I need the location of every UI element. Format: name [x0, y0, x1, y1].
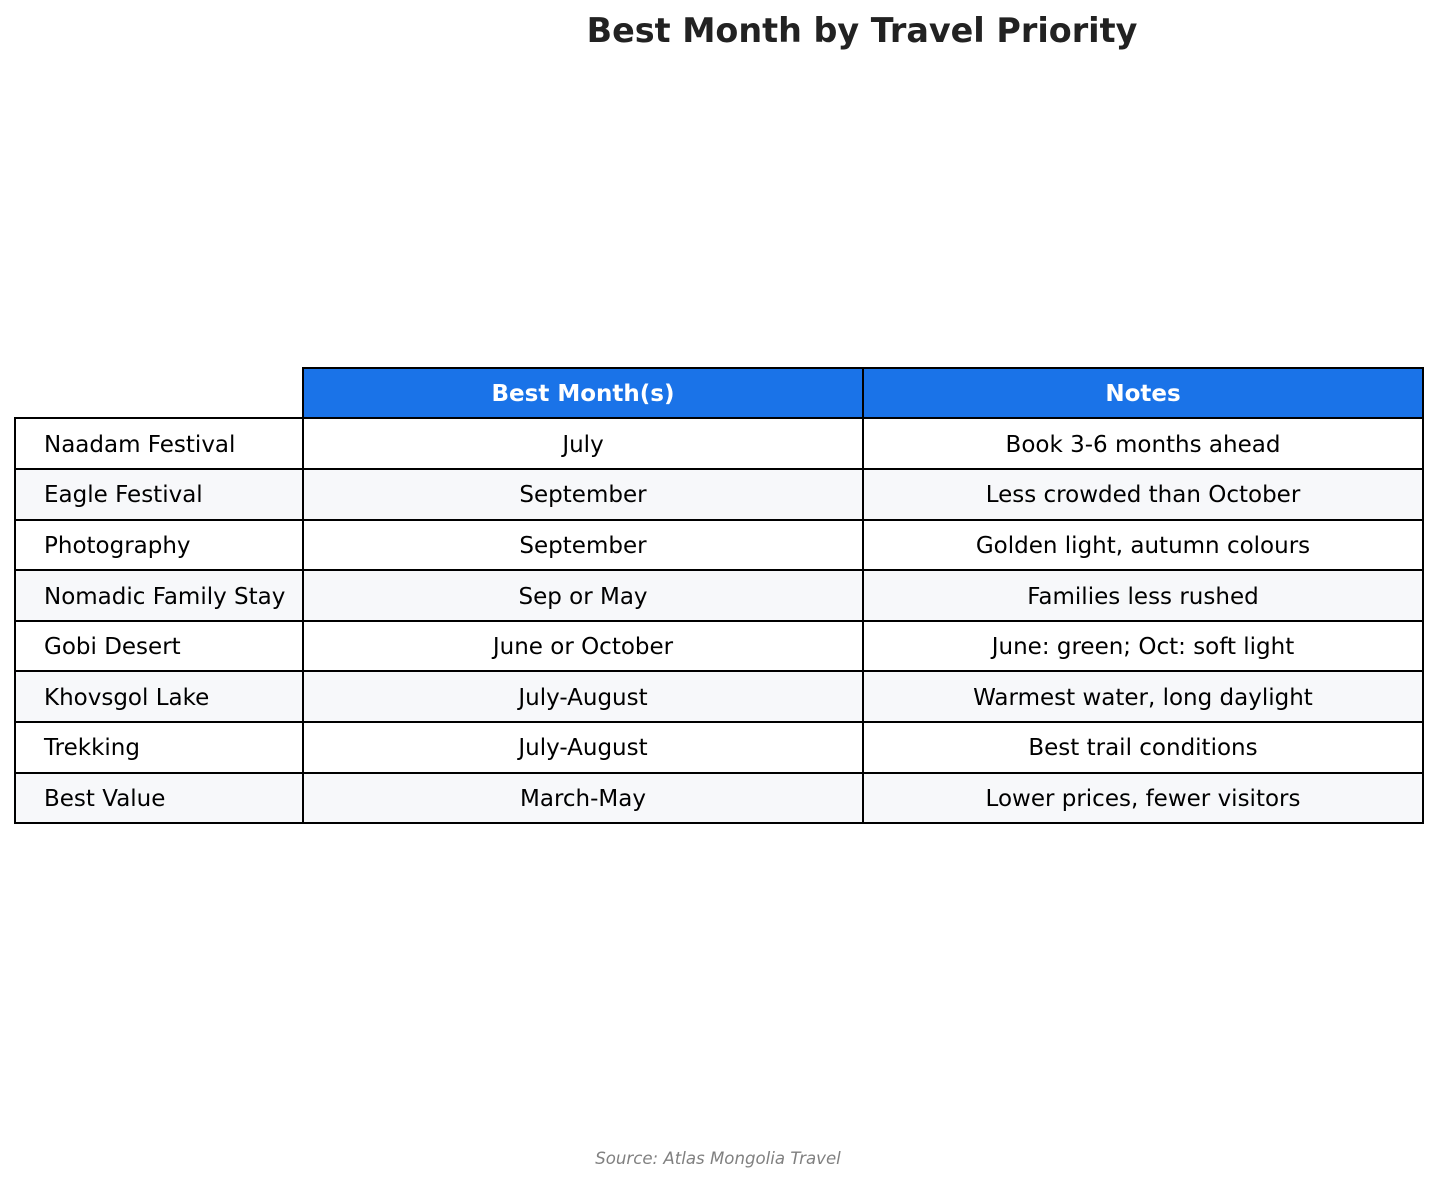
row labels: Gobi Desert	[44, 634, 181, 660]
notes column: June: green; Oct: soft light	[990, 634, 1294, 660]
notes column: Golden light, autumn colours	[976, 533, 1310, 559]
notes column: Book 3-6 months ahead	[1006, 432, 1280, 458]
source note: Source: Atlas Mongolia Travel	[595, 1149, 841, 1168]
best months column: September	[519, 533, 647, 559]
best months column: July	[560, 432, 604, 458]
notes column	[973, 432, 1313, 812]
notes column: Warmest water, long daylight	[973, 685, 1313, 711]
title: Best Month by Travel Priority	[587, 11, 1138, 50]
best months column: June or October	[491, 634, 674, 660]
row labels: Photography	[44, 533, 191, 559]
row labels: Eagle Festival	[44, 482, 203, 508]
notes column: Less crowded than October	[986, 482, 1301, 508]
best months column	[491, 432, 674, 812]
row backgrounds	[15, 418, 1423, 823]
header row: Notes	[1105, 381, 1181, 407]
row labels	[43, 432, 285, 812]
best months column: July-August	[516, 735, 648, 761]
header row	[303, 368, 1423, 418]
row labels: Naadam Festival	[44, 432, 235, 458]
notes column: Families less rushed	[1027, 584, 1259, 610]
best months column: September	[519, 482, 647, 508]
best months column: Sep or May	[518, 584, 648, 610]
best months column: March-May	[520, 786, 646, 812]
notes column: Best trail conditions	[1028, 735, 1258, 761]
row labels: Trekking	[43, 735, 140, 761]
header row: Best Month(s)	[492, 381, 674, 407]
row labels: Nomadic Family Stay	[44, 584, 285, 610]
notes column: Lower prices, fewer visitors	[986, 786, 1300, 812]
row labels: Best Value	[44, 786, 165, 812]
best months column: July-August	[516, 685, 648, 711]
table	[15, 368, 1423, 823]
row labels: Khovsgol Lake	[44, 685, 209, 711]
